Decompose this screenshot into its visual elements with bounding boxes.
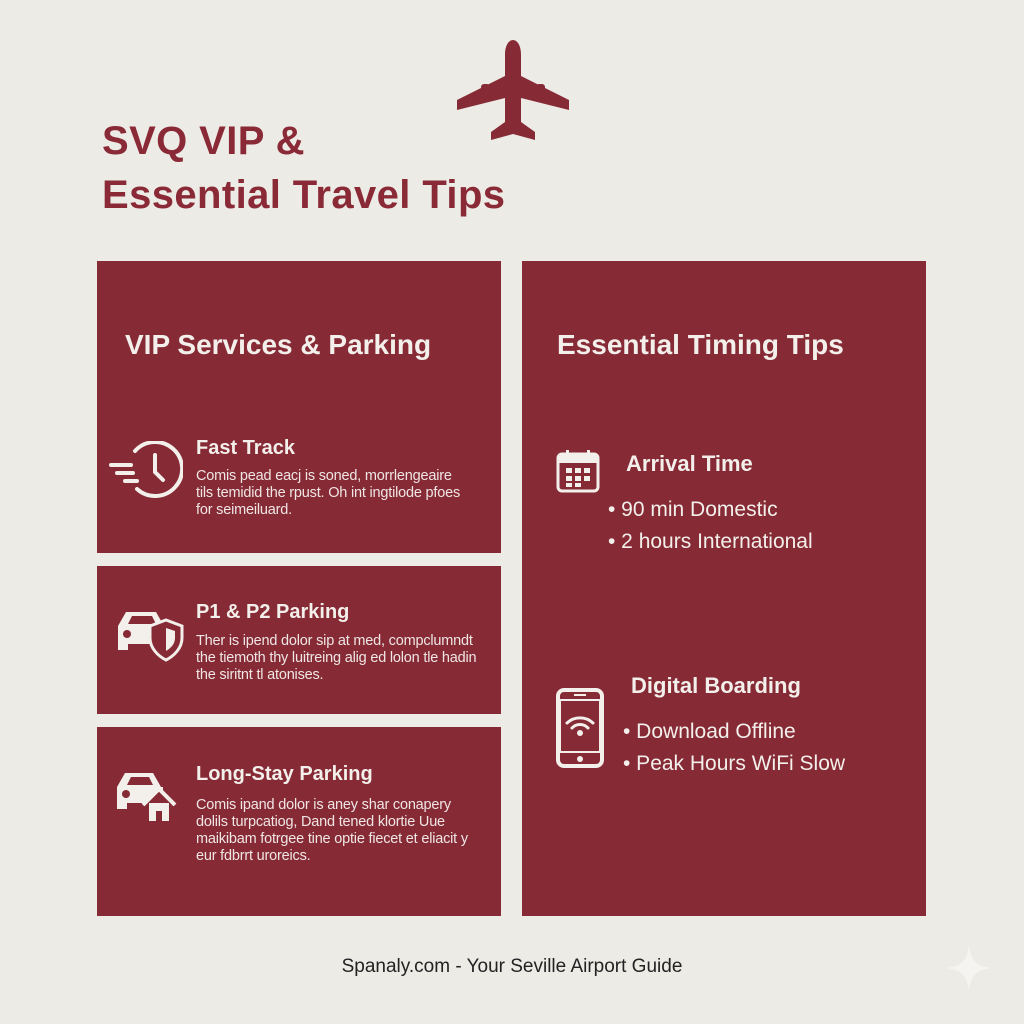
heading: VIP services: VIP Services & Parking — [125, 329, 431, 360]
panel: P1 P2 parking — [97, 566, 501, 714]
text: fast track: Comis pead eacj is soned, morrlengeaire tils temidid the rpust. Oh int ingtilode pfoes for seimeiluard. — [196, 468, 460, 518]
title: SVQ VIP & — [102, 119, 305, 163]
bullets: digital: • Peak Hours WiFi Slow — [623, 752, 845, 775]
icon: car house — [117, 773, 176, 821]
text: long stay: Comis ipand dolor is aney shar conapery dolils turpcatiog, Dand tened klortie Uue maikibam fotrgee tine optie fiecet et eliacit y eur fdbrrt uroreics. — [196, 797, 468, 864]
heading: long stay: Long-Stay Parking — [196, 763, 373, 785]
bullets: digital: • Download Offline — [623, 720, 796, 743]
heading: digital boarding: Digital Boarding — [631, 673, 801, 698]
icon: sparkle — [949, 948, 989, 988]
heading: arrival: Arrival Time — [626, 451, 753, 476]
title — [102, 119, 505, 217]
bullets: arrival — [608, 498, 813, 553]
bullets: arrival: • 90 min Domestic — [608, 498, 778, 521]
bullets: arrival: • 2 hours International — [608, 530, 813, 553]
icon: phone wifi — [556, 688, 604, 768]
icon: clock — [109, 441, 183, 498]
footer: Spanaly.com - Your Seville Airport Guide — [342, 956, 682, 977]
panel: long stay — [97, 727, 501, 916]
bullets: digital — [623, 720, 846, 775]
text: P1 P2: Ther is ipend dolor sip at med, compclumndt the tiemoth thy luitreing alig ed lolon tle hadin the siritnt tl atonises. — [196, 633, 476, 683]
panel: essential timing tips — [522, 261, 926, 916]
icon: airplane — [457, 40, 569, 140]
icon: car shield — [118, 612, 184, 662]
title: Essential Travel Tips — [102, 173, 505, 217]
icon: calendar — [556, 450, 600, 492]
panel: fast track — [97, 261, 501, 553]
heading: fast track: Fast Track — [196, 437, 295, 459]
heading: timing: Essential Timing Tips — [557, 329, 844, 360]
heading: P1 P2: P1 & P2 Parking — [196, 601, 349, 623]
